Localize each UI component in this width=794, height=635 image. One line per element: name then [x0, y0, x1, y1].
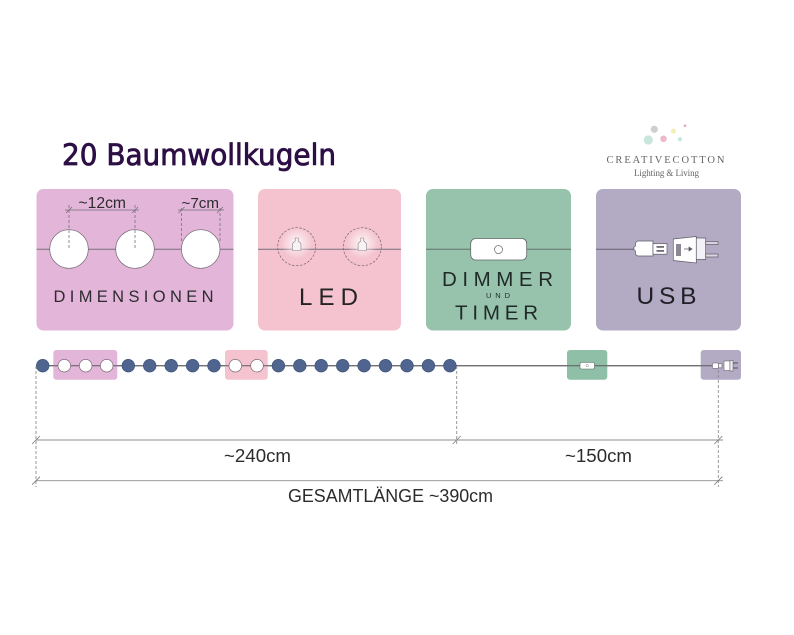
label: led: LED [299, 284, 358, 311]
label: 150cm: ~150cm [565, 446, 632, 466]
label: dimmer: DIMMER [442, 268, 553, 291]
label: dimensionen: DIMENSIONEN [54, 288, 214, 306]
switch icon [471, 238, 527, 260]
mini panel: usb [701, 350, 741, 380]
ball 2 [116, 230, 154, 268]
logo: creativecotton [606, 124, 725, 178]
label: usb: USB [636, 283, 696, 310]
led bulb 2 [343, 227, 381, 266]
usb plug icon [634, 236, 718, 263]
panel: dimensionen: ~12cm [78, 195, 126, 212]
label: timer: TIMER [455, 302, 538, 324]
mini panel: dimmer [567, 350, 607, 380]
label: und: UND [486, 291, 511, 300]
panel: led [258, 189, 401, 330]
ball 3 [181, 230, 220, 268]
mini usb plug [712, 360, 738, 371]
panel: dimmer und timer [426, 189, 571, 330]
logo: creativecotton: Lighting & Living [634, 168, 700, 178]
mini panel: dimensionen [53, 350, 117, 380]
string of cotton balls [36, 359, 456, 372]
logo: creativecotton: CREATIVECOTTON [606, 155, 725, 166]
label: gesamtlaenge: GESAMTLÄNGE ~390cm [288, 485, 493, 506]
label: 240cm: ~240cm [224, 446, 291, 466]
chain cable over panels [42, 365, 712, 367]
dimension: 7cm: ~7cm [182, 195, 219, 212]
title: 20 Baumwollkugeln [62, 138, 336, 172]
led bulb 1 [278, 227, 316, 266]
dimension: 12cm [65, 205, 224, 249]
panel: dimensionen [36, 189, 234, 330]
mini panel: led [225, 350, 268, 380]
mini switch [580, 362, 594, 369]
ball 1 [50, 230, 88, 268]
panel: usb [596, 189, 741, 330]
dimension lines [32, 366, 723, 487]
chain cable [42, 365, 740, 367]
